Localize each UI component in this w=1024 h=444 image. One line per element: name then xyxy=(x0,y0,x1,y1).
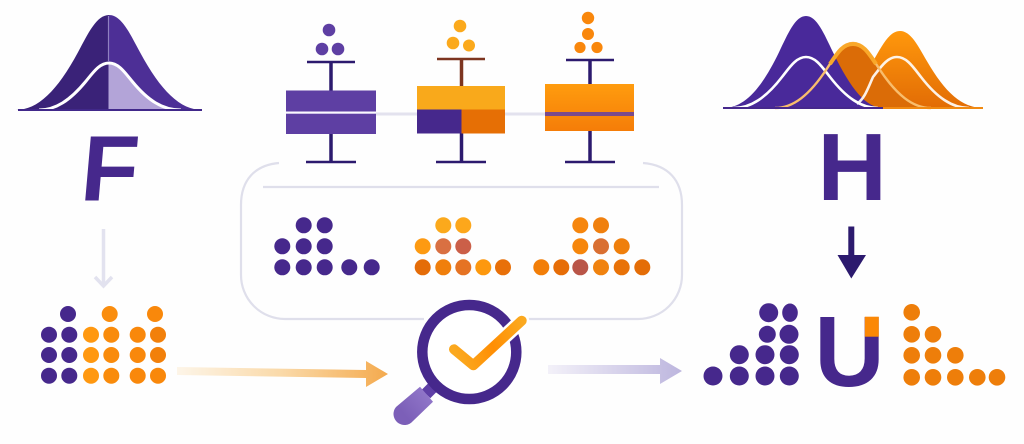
arrow: light down arrow xyxy=(95,229,112,286)
connector line between box plots xyxy=(376,112,545,116)
heading: letter H: H xyxy=(818,114,887,221)
dots: orange group xyxy=(533,217,650,275)
heading: letter F: F xyxy=(77,117,143,220)
panel: rounded dot panel xyxy=(241,163,682,319)
icon: magnifier with check mark xyxy=(393,305,522,425)
panel: right overlapping bell curves xyxy=(723,16,983,108)
box plot: amber and split xyxy=(417,20,505,162)
arrow: dark down arrow xyxy=(838,226,866,278)
dot grid: right purple staircase xyxy=(704,303,799,386)
dots: amber group xyxy=(415,217,511,275)
dot grid: left three groups xyxy=(41,306,166,384)
dot grid: right orange staircase xyxy=(903,304,1005,386)
box plot: orange xyxy=(545,12,634,162)
arrow: lavender gradient arrow xyxy=(548,358,682,384)
icon: letter U with orange tip: U xyxy=(814,296,885,407)
dots: purple group xyxy=(274,217,380,275)
box plot: purple xyxy=(286,24,376,162)
panel: left bell curve xyxy=(16,15,202,110)
arrow: orange gradient arrow xyxy=(177,361,388,387)
